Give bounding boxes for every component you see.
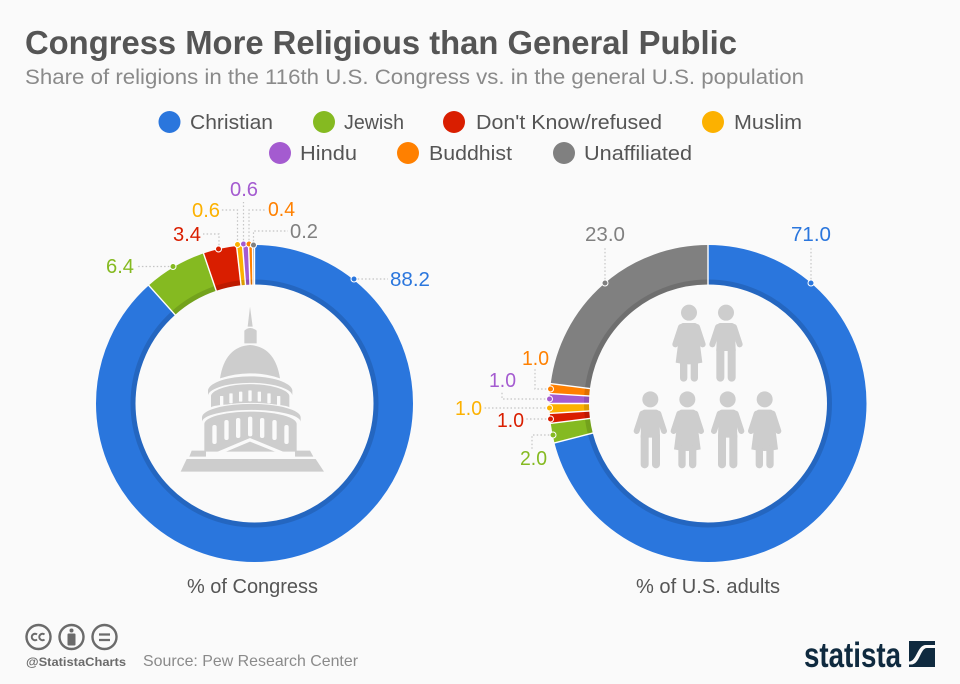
legend xyxy=(158,111,802,165)
legend item: Christian xyxy=(158,111,273,134)
data label: Buddhist 1.0: 1.0 xyxy=(522,348,549,370)
legend item: Muslim: Muslim xyxy=(734,112,802,134)
data label: Buddhist 1.0 xyxy=(522,348,554,392)
handle: @StatistaCharts xyxy=(26,655,126,669)
data label: Hindu 0.6: 0.6 xyxy=(230,179,258,201)
icon: no derivatives xyxy=(92,625,116,649)
data label: Muslim 1.0 xyxy=(455,398,552,420)
legend item: Unaffiliated xyxy=(553,142,692,165)
source: Source: Pew Research Center xyxy=(143,653,359,670)
data label: Christian 71.0 xyxy=(791,224,831,286)
data label: Jewish 2.0 xyxy=(520,432,556,470)
data label: Don't Know 3.4 xyxy=(173,224,222,252)
data label: Jewish 6.4: 6.4 xyxy=(106,256,134,278)
data label: Hindu 0.6 xyxy=(230,179,258,247)
legend item: Hindu: Hindu xyxy=(300,143,357,165)
legend item: Don't Know/refused: Don't Know/refused xyxy=(476,112,662,134)
legend item: Muslim xyxy=(702,111,802,134)
logo: statista: statista xyxy=(804,636,901,675)
donut chart: % of Congress xyxy=(106,179,430,542)
data label: Muslim 0.6 xyxy=(192,200,240,248)
legend item: Hindu xyxy=(269,142,357,165)
data label: Christian 71.0: 71.0 xyxy=(791,224,831,246)
icon: woman xyxy=(675,305,703,378)
icon: group of people xyxy=(637,305,778,465)
data label: Unaffiliated 23.0: 23.0 xyxy=(585,224,625,246)
subtitle: Share of religions in the 116th U.S. Congress vs. in the general U.S. population xyxy=(25,66,804,89)
icon: cc xyxy=(26,625,50,649)
icon: woman xyxy=(751,391,778,465)
legend item: Jewish: Jewish xyxy=(344,112,404,134)
caption: % of U.S. adults: % of U.S. adults xyxy=(636,576,780,598)
icon: man xyxy=(714,391,741,464)
data label: Unaffiliated 0.2: 0.2 xyxy=(290,221,318,243)
title: Congress More Religious than General Public xyxy=(25,24,737,61)
data label: Muslim 0.6: 0.6 xyxy=(192,200,220,222)
data label: Don't Know 1.0 xyxy=(497,410,554,432)
icon: attribution xyxy=(60,625,84,649)
data label: Muslim 1.0: 1.0 xyxy=(455,398,482,420)
legend item: Christian: Christian xyxy=(190,112,273,134)
data label: Don't Know 3.4: 3.4 xyxy=(173,224,201,246)
legend item: Unaffiliated: Unaffiliated xyxy=(584,143,692,165)
icon: cc license xyxy=(26,625,116,649)
caption: % of Congress: % of Congress xyxy=(187,576,318,598)
icon: man xyxy=(637,391,664,464)
data label: Unaffiliated 0.2 xyxy=(250,221,318,248)
data label: Buddhist 0.4: 0.4 xyxy=(268,199,295,221)
donut chart: % of U.S. adults xyxy=(455,224,847,542)
icon: Capitol building xyxy=(181,307,324,472)
legend item: Buddhist: Buddhist xyxy=(429,143,512,165)
icon: statista mark xyxy=(909,641,935,667)
data label: Jewish 6.4 xyxy=(106,256,176,278)
data label: Buddhist 0.4 xyxy=(246,199,295,247)
data label: Christian 88.2: 88.2 xyxy=(390,269,430,291)
data label: Jewish 2.0: 2.0 xyxy=(520,448,547,470)
data label: Christian 88.2 xyxy=(351,269,430,291)
legend item: Jewish xyxy=(313,111,404,134)
legend item: Buddhist xyxy=(397,142,512,165)
icon: man xyxy=(712,305,740,378)
data label: Hindu 1.0 xyxy=(489,370,552,402)
icon: woman xyxy=(674,391,701,465)
data label: Hindu 1.0: 1.0 xyxy=(489,370,516,392)
data label: Unaffiliated 23.0 xyxy=(585,224,625,286)
data label: Don't Know 1.0: 1.0 xyxy=(497,410,524,432)
